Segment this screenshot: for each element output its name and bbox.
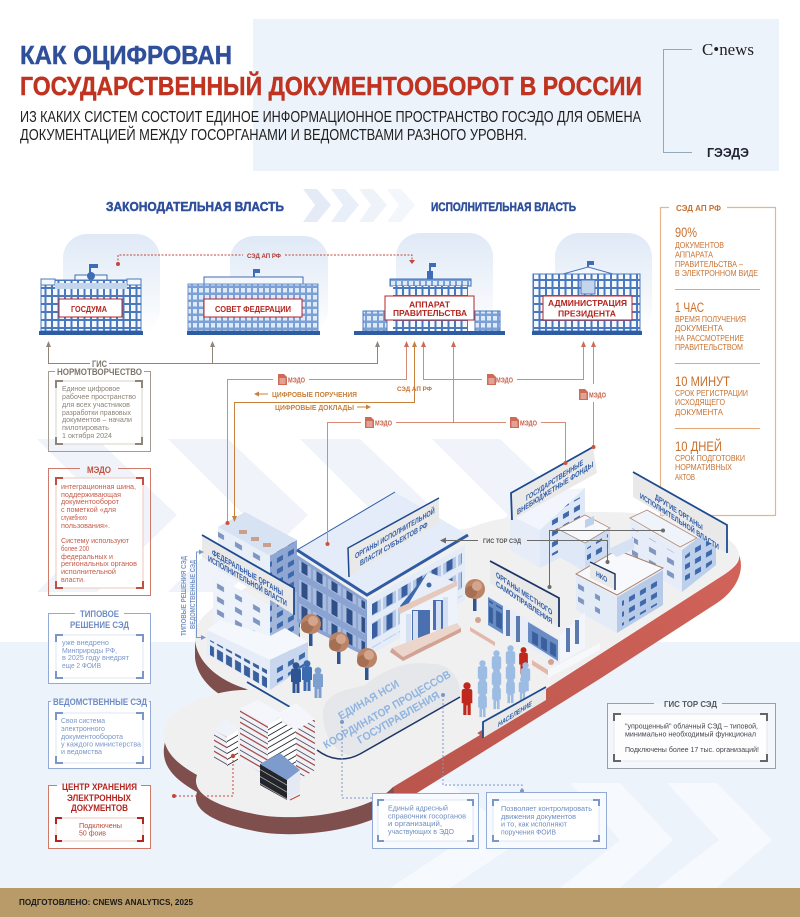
subtitle: ИЗ КАКИХ СИСТЕМ СОСТОИТ ЕДИНОЕ ИНФОРМАЦИОННОЕ ПРОСТРАНСТВО ГОСЭДО ДЛЯ ОБМЕНА	[20, 109, 642, 126]
panel: MEDO	[48, 465, 150, 596]
text block: документооборота	[61, 732, 124, 741]
stat: 10 minutes: СРОК РЕГИСТРАЦИИ	[675, 389, 748, 398]
callout: GIS TOR SED: "упрощенный" облачный СЭД – типовой,	[625, 722, 758, 730]
text block	[62, 638, 130, 670]
stat: 90%: 90%	[675, 225, 697, 240]
panel: typical SED solution: ТИПОВОЕ	[80, 609, 119, 619]
sign	[633, 472, 727, 553]
subtitle	[20, 109, 642, 144]
SED AP RF dotted connector: СЭД АП РФ	[247, 253, 281, 260]
text block: Своя система	[61, 716, 106, 725]
text block: пользования».	[61, 521, 110, 530]
stat: 1 hour: НА РАССМОТРЕНИЕ	[675, 334, 744, 343]
text block: поддерживающая	[61, 490, 121, 499]
footer	[0, 888, 800, 917]
text block: 1 октября 2024	[62, 431, 112, 440]
label: АППАРАТ	[409, 300, 451, 310]
typical / departmental bracket	[181, 550, 206, 640]
building: Gosduma	[39, 234, 160, 335]
text block	[61, 716, 142, 756]
panel: departmental SED	[48, 697, 150, 768]
label: MEDO	[365, 417, 392, 428]
callout: address directory: Единый адресный	[388, 804, 448, 812]
label: digital orders: ЦИФРОВЫЕ ПОРУЧЕНИЯ	[272, 390, 357, 399]
people group	[291, 660, 323, 698]
text block: федеральных и	[61, 552, 113, 561]
data centre	[214, 682, 315, 800]
text block: пилотировать	[62, 423, 109, 432]
cloud: unified NSI: ГОСУПРАВЛЕНИЯ	[356, 690, 442, 747]
heading: legislative power: ЗАКОНОДАТЕЛЬНАЯ ВЛАСТЬ	[106, 200, 284, 214]
stat: 1 hour: ВРЕМЯ ПОЛУЧЕНИЯ	[675, 315, 746, 324]
text block: уже внедрено	[62, 638, 109, 647]
cloud: unified NSI: КООРДИНАТОР ПРОЦЕССОВ	[322, 669, 453, 752]
stat: 1 hour: ДОКУМЕНТА	[675, 324, 724, 333]
text block: документов – начали	[62, 415, 132, 424]
GIS TOR SED connectors	[440, 528, 665, 589]
GIS rulemaking arrows: ГИС	[92, 359, 107, 370]
stat: 1 hour: ПРАВИТЕЛЬСТВОМ	[675, 343, 743, 352]
text block: Систему используют	[61, 536, 130, 545]
text block: в 2025 году внедрят	[62, 653, 130, 662]
label: MEDO: МЭДО	[589, 392, 606, 400]
callout: document control: поручения ФОИВ	[501, 828, 556, 836]
text block: власти.	[61, 575, 85, 584]
storage centre dotted connector	[172, 754, 235, 798]
subtitle: ДОКУМЕНТАЦИЕЙ МЕЖДУ ГОСОРГАНАМИ И ВЕДОМСТВАМИ РАЗНОГО УРОВНЯ.	[20, 126, 527, 144]
sign: ГОСУДАРСТВЕННЫЕ	[526, 458, 584, 503]
text block: документооборот	[61, 497, 120, 506]
sign: ФЕДЕРАЛЬНЫЕ ОРГАНЫ	[212, 547, 283, 598]
label: АДМИНИСТРАЦИЯ	[548, 298, 627, 308]
panel: GIS rulemaking: НОРМОТВОРЧЕСТВО	[57, 367, 142, 377]
text block	[61, 482, 137, 584]
sign: ИСПОЛНИТЕЛЬНОЙ ВЛАСТИ	[208, 552, 287, 609]
text block: разработки правовых	[62, 408, 131, 417]
building: local government	[470, 561, 600, 678]
label: MEDO: МЭДО	[288, 378, 305, 384]
GIS TOR SED connectors: ГИС ТОР СЭД	[483, 538, 521, 545]
label: ПРЕЗИДЕНТА	[558, 308, 616, 318]
label: MEDO: МЭДО	[375, 420, 392, 428]
stat: 90%	[675, 225, 758, 278]
title	[20, 40, 642, 101]
panel: electronic document storage centre: ЭЛЕКТРОННЫХ	[67, 793, 131, 803]
sign: ОРГАНЫ ИСПОЛНИТЕЛЬНОЙ	[355, 506, 435, 561]
text block: рабочее пространство	[62, 392, 136, 401]
panel: electronic document storage centre: ЦЕНТР ХРАНЕНИЯ	[62, 782, 137, 792]
building: NGO	[576, 537, 663, 633]
cloud: unified NSI: ЕДИНАЯ НСИ	[336, 678, 401, 723]
callout: address directory: участвующих в ЭДО	[388, 827, 454, 836]
panel: SED AP RF stats: СЭД АП РФ	[676, 203, 721, 213]
text block: с пометкой «для	[61, 505, 116, 514]
stat: 10 days	[675, 439, 745, 482]
stat: 90%: ПРАВИТЕЛЬСТВА –	[675, 260, 744, 269]
stat: 1 hour: 1 ЧАС	[675, 300, 704, 315]
callout: document control: и то, как исполняют	[501, 820, 568, 828]
text block: исполнительной	[61, 567, 116, 576]
SED AP RF dotted connector	[116, 253, 415, 266]
text block: и ведомства	[61, 747, 103, 756]
callout: address directory: справочник госорганов	[388, 812, 466, 820]
text block: Минприроды РФ,	[62, 646, 117, 655]
label: digital reports: ЦИФРОВЫЕ ДОКЛАДЫ	[275, 403, 354, 412]
sign: ДРУГИЕ ОРГАНЫ	[655, 492, 703, 532]
label: MEDO	[487, 374, 513, 385]
callout: GIS TOR SED	[608, 699, 776, 768]
logos with bracket: C•news	[702, 40, 754, 59]
panel: typical SED solution: РЕШЕНИЕ СЭД	[70, 620, 130, 630]
label	[543, 296, 632, 320]
stat: 1 hour	[675, 300, 746, 352]
label: ПРАВИТЕЛЬСТВА	[393, 308, 467, 318]
stat: 10 minutes: 10 МИНУТ	[675, 374, 730, 389]
typical / departmental bracket: ВЕДОМСТВЕННЫЕ СЭД	[190, 560, 197, 629]
text block	[79, 821, 122, 838]
text block: более 200	[61, 544, 89, 553]
text block: Единое цифровое	[62, 384, 120, 393]
text block: еще 2 ФОИВ	[62, 661, 101, 670]
building: state extra-budgetary funds	[510, 447, 597, 568]
text block: у каждого министерства	[61, 740, 142, 748]
building: small centre block	[558, 515, 610, 572]
GIS rulemaking arrows	[46, 341, 380, 370]
population crowd	[462, 645, 530, 717]
stat: 10 days: 10 ДНЕЙ	[675, 439, 722, 454]
building: Federation Council	[187, 236, 328, 335]
label: MEDO	[579, 389, 606, 400]
title: ГОСУДАРСТВЕННЫЙ ДОКУМЕНТООБОРОТ В РОССИИ	[20, 71, 642, 101]
stat: 90%: АППАРАТА	[675, 250, 714, 260]
callout: GIS TOR SED: минимально необходимый функционал	[625, 730, 756, 738]
stat: 10 minutes: ИСХОДЯЩЕГО	[675, 398, 725, 407]
sign	[348, 498, 439, 577]
panel: departmental SED: ВЕДОМСТВЕННЫЕ СЭД	[53, 697, 148, 707]
label: SED AP RF: СЭД АП РФ	[397, 386, 432, 393]
sign: ИСПОЛНИТЕЛЬНОЙ ВЛАСТИ	[640, 489, 719, 552]
panel: MEDO: МЭДО	[87, 465, 111, 475]
sign: ВНЕБЮДЖЕТНЫЕ ФОНДЫ	[517, 460, 593, 517]
callout: document control: движения документов	[501, 812, 576, 821]
text block: 50 фоив	[79, 828, 106, 838]
stat: 10 minutes: ДОКУМЕНТА	[675, 408, 724, 417]
sign: population: НАСЕЛЕНИЕ	[498, 699, 532, 729]
label: MEDO: МЭДО	[496, 378, 513, 384]
callout: address directory: и организаций,	[388, 819, 442, 828]
label: ГОСДУМА	[71, 304, 107, 314]
stat: 10 minutes	[675, 374, 748, 417]
label: MEDO	[278, 374, 305, 385]
text block: региональных органов	[61, 559, 137, 568]
logos with bracket	[664, 40, 754, 160]
panel: electronic document storage centre	[48, 782, 150, 848]
isometric platform	[164, 512, 741, 834]
sign: ВЛАСТИ СУБЪЕКТОВ РФ	[360, 520, 428, 568]
stat: 90%: В ЭЛЕКТРОННОМ ВИДЕ	[675, 269, 758, 278]
heading: executive power: ИСПОЛНИТЕЛЬНАЯ ВЛАСТЬ	[431, 200, 576, 214]
building: federal executive bodies	[202, 512, 308, 690]
text block	[62, 384, 136, 440]
title: КАК ОЦИФРОВАН	[20, 40, 232, 70]
label	[385, 296, 474, 320]
building: Government Staff	[354, 233, 505, 335]
sign: САМОУПРАВЛЕНИЯ	[496, 579, 552, 626]
chevrons between headings	[303, 189, 415, 222]
sign: population	[483, 687, 546, 738]
stat: 10 days: СРОК ПОДГОТОВКИ	[675, 454, 745, 463]
label	[204, 299, 302, 317]
footer: ПОДГОТОВЛЕНО: CNEWS ANALYTICS, 2025	[19, 897, 193, 907]
callout: address directory	[372, 794, 478, 848]
building: other executive bodies	[630, 472, 727, 592]
callout: GIS TOR SED: ГИС ТОР СЭД	[664, 699, 717, 709]
typical / departmental bracket: ТИПОВЫЕ РЕШЕНИЯ СЭД	[181, 556, 188, 636]
panel: electronic document storage centre: ДОКУМЕНТОВ	[71, 803, 128, 813]
callout: document control	[486, 792, 606, 848]
text block: электронного	[61, 724, 105, 733]
panel: SED AP RF stats	[660, 203, 776, 516]
digital orders and reports lines	[234, 346, 414, 518]
sign: ОРГАНЫ МЕСТНОГО	[496, 570, 553, 618]
text block: для всех участников	[62, 400, 130, 409]
sign: НКО	[596, 569, 607, 585]
stat: 90%: ДОКУМЕНТОВ	[675, 241, 724, 250]
callout: GIS TOR SED: Подключены более 17 тыс. организаций!	[625, 745, 759, 754]
text block: Подключены	[79, 821, 122, 830]
trees	[301, 579, 485, 680]
label: СОВЕТ ФЕДЕРАЦИИ	[215, 304, 291, 314]
NSI dotted connectors	[340, 693, 524, 798]
text block: служебного	[61, 513, 87, 522]
panel: GIS rulemaking	[48, 367, 150, 452]
callout: document control: Позволяет контролировать	[501, 804, 592, 813]
label: MEDO	[510, 417, 537, 428]
panel: typical SED solution	[48, 609, 150, 684]
portico	[390, 572, 461, 661]
stat: 10 days: АКТОВ	[675, 473, 695, 482]
building: regional executive bodies	[297, 492, 468, 661]
MEDO connector lines	[228, 346, 594, 543]
label: MEDO: МЭДО	[520, 420, 537, 428]
sign	[202, 535, 294, 615]
building: Presidential Administration	[532, 233, 652, 335]
connector arrowheads and dots	[226, 341, 596, 546]
logos with bracket: ГЭЭДЭ	[707, 145, 749, 160]
stat: 10 days: НОРМАТИВНЫХ	[675, 463, 733, 472]
text block: интеграционная шина,	[61, 482, 136, 491]
